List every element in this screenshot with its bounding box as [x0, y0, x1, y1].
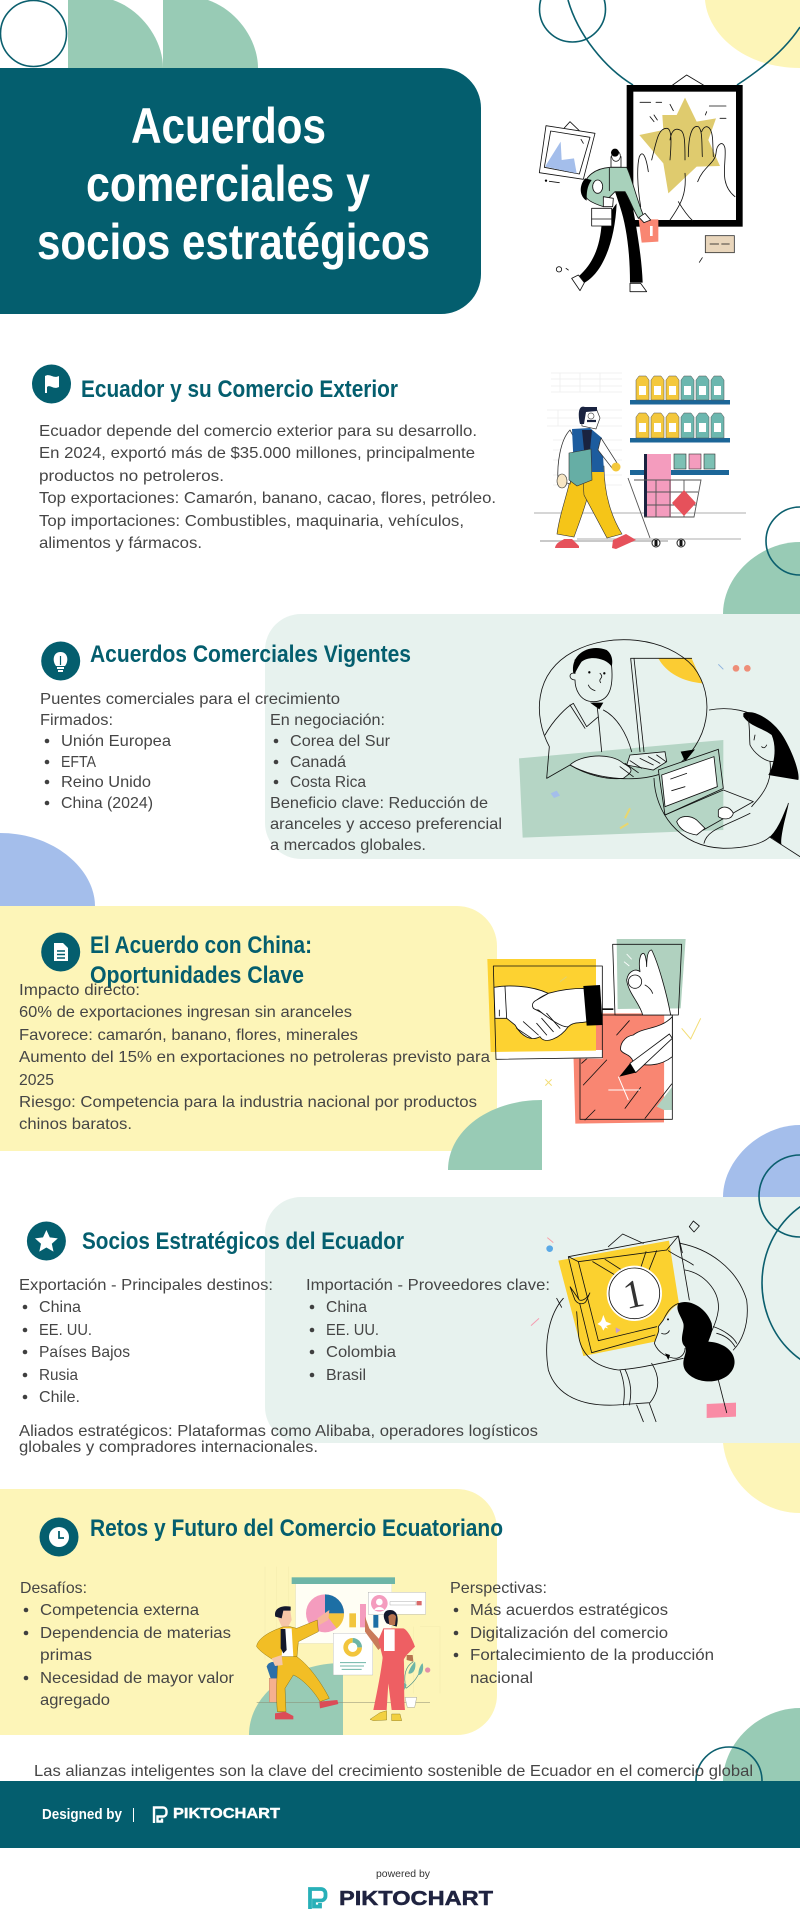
icon: star: [27, 1222, 66, 1260]
panel background: [265, 614, 800, 859]
list: en negociación: Beneficio clave: Reducción de: [270, 795, 488, 812]
title: socios estratégicos: [37, 214, 430, 270]
decorative blob: blue left: [0, 833, 95, 906]
logo: Piktochart white: PIKTOCHART: [173, 1806, 280, 1822]
list: exportación: Rusia: [39, 1367, 78, 1384]
list: exportación: China: [39, 1299, 81, 1316]
panel background: [0, 906, 497, 1151]
icon: document: [41, 932, 80, 972]
list: firmados: Firmados:: [40, 712, 113, 729]
list: firmados: China (2024): [61, 795, 153, 812]
icon: clock: [40, 1518, 78, 1556]
text block: 2025: [19, 1072, 54, 1089]
text block: Top exportaciones: Camarón, banano, cacao, flores, petróleo.: [39, 490, 496, 507]
list: en negociación: Canadá: [290, 754, 346, 771]
list: en negociación: [270, 712, 502, 854]
list: firmados: EFTA: [61, 754, 96, 771]
section 5: Retos y Futuro del Comercio Ecuatoriano: [0, 1489, 714, 1735]
text block: productos no petroleros.: [39, 468, 224, 485]
text block: [19, 982, 490, 1133]
text block: Impacto directo:: [19, 982, 140, 999]
decorative blob: green: [448, 1100, 542, 1170]
logo: Piktochart colour: PIKTOCHART: [339, 1887, 494, 1910]
text block: Riesgo: Competencia para la industria nacional por productos: [19, 1094, 477, 1111]
text block: alimentos y fármacos.: [39, 535, 202, 552]
section 1: Ecuador y su Comercio Exterior: [32, 364, 496, 552]
list: perspectivas: [450, 1580, 714, 1687]
list: en negociación: a mercados globales.: [270, 837, 426, 854]
title: [37, 98, 430, 270]
text block: Favorece: camarón, banano, flores, minerales: [19, 1027, 358, 1044]
list: en negociación: Corea del Sur: [290, 733, 391, 750]
list: desafíos: Desafíos:: [20, 1580, 87, 1597]
list: firmados: Reino Unido: [61, 774, 151, 791]
text block: aliados: [19, 1423, 538, 1456]
list: desafíos: Dependencia de materias: [40, 1625, 231, 1642]
section 4: Socios Estratégicos del Ecuador: [19, 1197, 800, 1456]
title: comerciales y: [86, 156, 370, 212]
decorative shapes bottom right: [696, 1708, 800, 1781]
list: desafíos: Necesidad de mayor valor: [40, 1670, 235, 1687]
decorative blob: yellow right: [723, 1443, 800, 1513]
text block: Top importaciones: Combustibles, maquinaria, vehículos,: [39, 513, 464, 530]
icon: light bulb: [41, 642, 80, 680]
section 2: Acuerdos Comerciales Vigentes: [40, 614, 800, 859]
list: desafíos: [20, 1580, 235, 1709]
text block: 60% de exportaciones ingresan sin aranceles: [19, 1004, 352, 1021]
panel background: [265, 1197, 800, 1443]
heading: Socios Estratégicos del Ecuador: [82, 1228, 404, 1255]
list: exportación: [19, 1277, 273, 1406]
list: perspectivas: nacional: [470, 1670, 533, 1687]
illustration: man with high-five picture frame: [539, 75, 739, 292]
icon: flag: [32, 364, 71, 404]
heading: Oportunidades Clave: [90, 962, 304, 989]
illustration: handshake collage: [487, 939, 701, 1124]
text block: Ecuador depende del comercio exterior para su desarrollo.: [39, 423, 477, 440]
list: en negociación: aranceles y acceso preferencial: [270, 816, 502, 833]
decorative circles over section 4: [759, 1155, 800, 1374]
illustration: business presentation: [257, 1567, 440, 1721]
text block: [39, 423, 496, 552]
divider: [133, 1808, 134, 1822]
closing statement: Las alianzas inteligentes son la clave del crecimiento sostenible de Ecuador en el comercio global: [34, 1763, 753, 1780]
heading: Retos y Futuro del Comercio Ecuatoriano: [90, 1515, 503, 1542]
title panel: [0, 68, 481, 314]
illustration: shopper in supermarket: [534, 373, 746, 549]
text block: chinos baratos.: [19, 1116, 132, 1133]
list: importación: EE. UU.: [326, 1322, 379, 1339]
list: exportación: Exportación - Principales destinos:: [19, 1277, 273, 1294]
heading: [90, 932, 312, 989]
list: importación: China: [326, 1299, 367, 1316]
illustration: video call: [519, 640, 800, 857]
list: importación: [306, 1277, 550, 1384]
list: perspectivas: Fortalecimiento de la producción: [470, 1647, 714, 1664]
list: importación: Colombia: [326, 1344, 396, 1361]
list: perspectivas: Digitalización del comercio: [470, 1625, 668, 1642]
list: perspectivas: Más acuerdos estratégicos: [470, 1602, 668, 1619]
list: importación: Importación - Proveedores clave:: [306, 1277, 550, 1294]
designed by: Designed by: [42, 1806, 123, 1823]
title: Acuerdos: [131, 98, 326, 154]
heading: Acuerdos Comerciales Vigentes: [90, 641, 411, 668]
panel background: [0, 1489, 497, 1735]
list: exportación: Países Bajos: [39, 1344, 130, 1361]
text block: En 2024, exportó más de $35.000 millones, principalmente: [39, 445, 475, 462]
powered by: powered by: [376, 1869, 430, 1880]
decorative shapes right of section 1: [723, 507, 800, 614]
list: perspectivas: Perspectivas:: [450, 1580, 547, 1597]
text block: Aumento del 15% en exportaciones no petroleras previsto para: [19, 1049, 490, 1066]
section 3: El Acuerdo con China: [0, 906, 542, 1170]
heading: Ecuador y su Comercio Exterior: [81, 376, 398, 403]
decorative shapes right of section 4: [723, 1125, 800, 1197]
text block: aliados: Aliados estratégicos: Plataformas como Alibaba, operadores logísticos: [19, 1423, 538, 1440]
list: desafíos: agregado: [40, 1692, 110, 1709]
text block: aliados: globales y compradores internacionales.: [19, 1439, 318, 1456]
illustration: woman holding medal frame: 1: [619, 1270, 648, 1318]
list: exportación: Chile.: [39, 1389, 80, 1406]
decorative header shapes: [0, 0, 800, 85]
decorative blob: green: [249, 1663, 343, 1735]
list: en negociación: En negociación:: [270, 712, 385, 729]
list: exportación: EE. UU.: [39, 1322, 92, 1339]
list: desafíos: primas: [40, 1647, 92, 1664]
illustration: woman holding medal frame: [531, 1221, 747, 1422]
list: importación: Brasil: [326, 1367, 366, 1384]
list: firmados: [40, 712, 171, 812]
list: en negociación: Costa Rica: [290, 774, 366, 791]
subtitle: Puentes comerciales para el crecimiento: [40, 691, 340, 708]
footer band: [0, 1781, 800, 1848]
heading: El Acuerdo con China:: [90, 932, 312, 959]
list: desafíos: Competencia externa: [40, 1602, 199, 1619]
list: firmados: Unión Europea: [61, 733, 171, 750]
